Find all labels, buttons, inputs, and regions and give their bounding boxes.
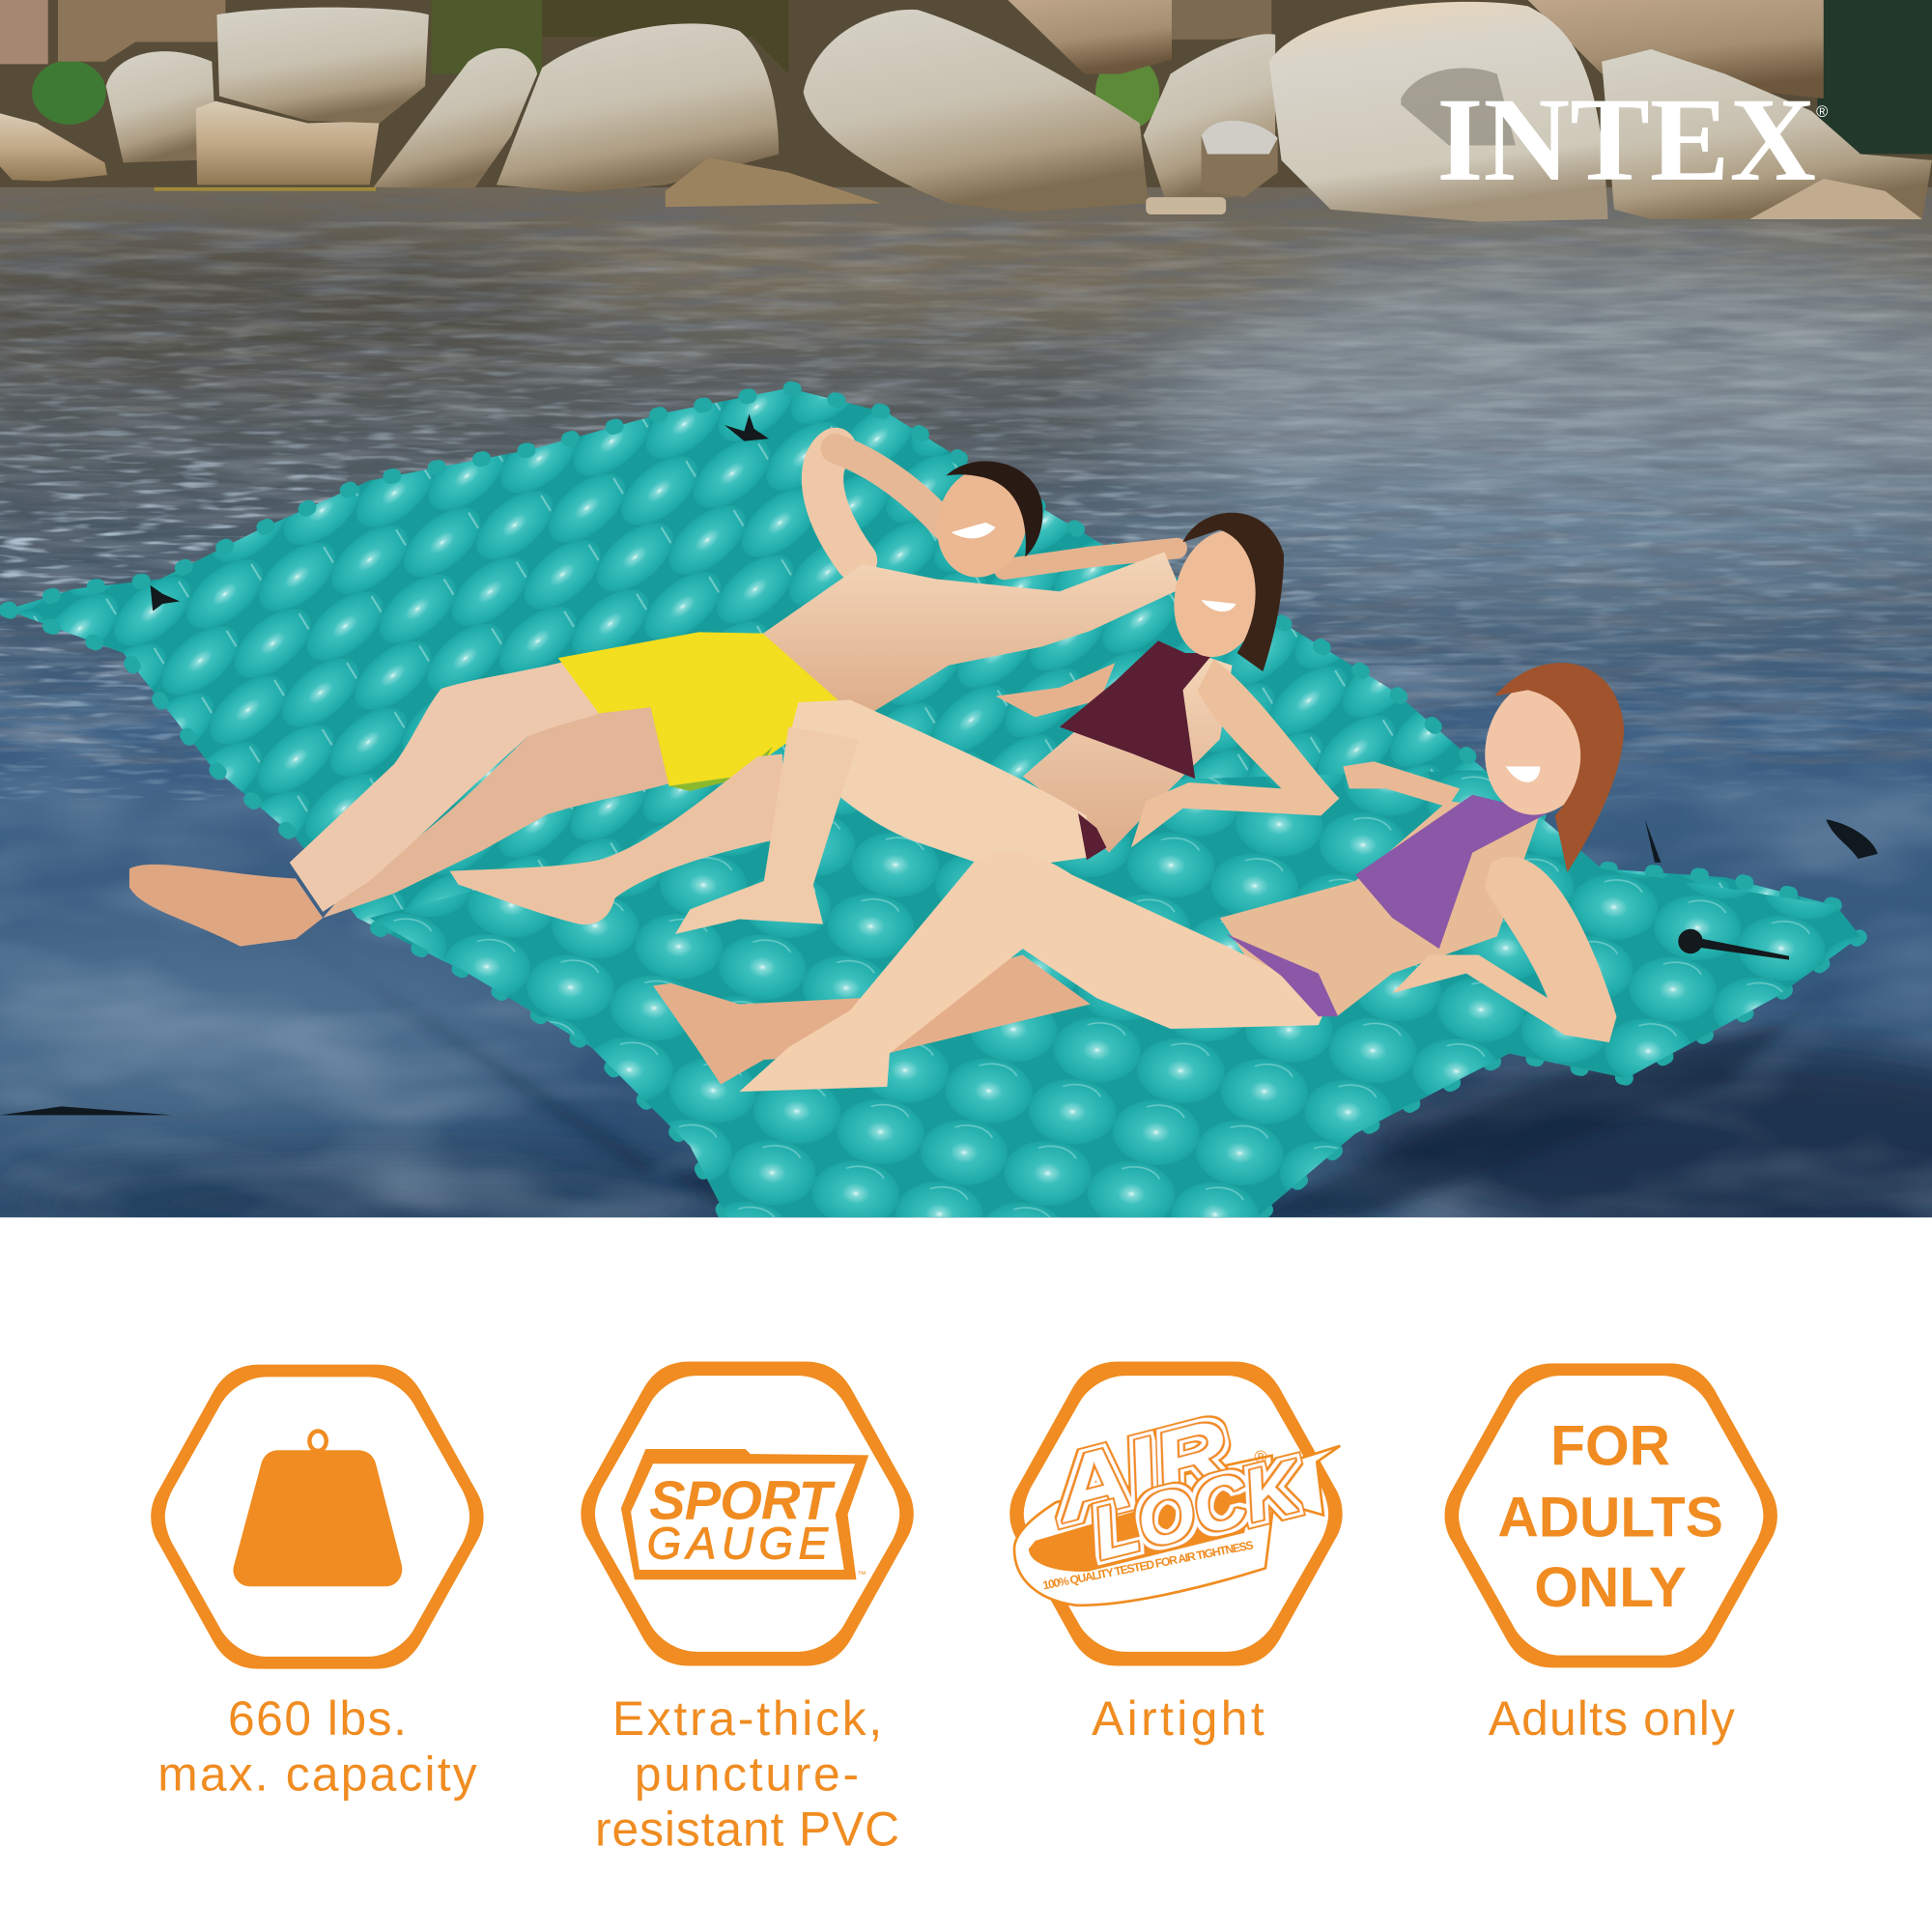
head	[1471, 667, 1609, 827]
caption: Adults only	[1489, 1691, 1735, 1746]
back leg	[653, 955, 1091, 1084]
caption: Extra-thick,	[612, 1691, 882, 1746]
upper leg	[290, 658, 599, 912]
INTEX logo: ®	[1816, 102, 1828, 121]
hexagon wording	[1497, 1415, 1723, 1619]
feature 2: sport gauge	[581, 1361, 914, 1857]
hexagon wording: FOR	[1550, 1415, 1670, 1478]
sport gauge logo	[621, 1449, 868, 1579]
feature 1: weight capacity	[151, 1365, 484, 1801]
banner and orange mass	[1014, 1446, 1340, 1605]
sport gauge logo: SPORT	[649, 1470, 837, 1531]
front leg	[739, 852, 1331, 1092]
maroon top	[1060, 640, 1213, 779]
mat shadow on water	[408, 1005, 1800, 1217]
icon: weight	[233, 1432, 402, 1586]
caption: max. capacity	[157, 1747, 477, 1801]
hexagon outline	[581, 1361, 914, 1665]
yellow shorts	[558, 632, 838, 786]
feature 3: airtight	[1009, 1361, 1343, 1746]
raised arm	[822, 448, 856, 560]
hexagon outline	[1009, 1361, 1343, 1665]
woman in purple bikini	[653, 663, 1624, 1092]
torso	[761, 552, 1180, 715]
hexagon wording: ADULTS	[1497, 1487, 1723, 1549]
caption: puncture-	[635, 1747, 859, 1801]
caption: resistant PVC	[595, 1803, 899, 1857]
arm	[1392, 857, 1616, 1042]
head	[925, 458, 1038, 587]
arm	[1131, 659, 1339, 848]
woman in maroon bikini	[450, 513, 1339, 934]
hair	[947, 461, 1042, 557]
thigh	[788, 699, 1087, 870]
air lock logo: ®	[1254, 1447, 1267, 1466]
torso	[1023, 653, 1233, 853]
head	[1161, 521, 1278, 667]
INTEX logo: INTEX	[1436, 73, 1816, 206]
lake photograph	[0, 0, 1932, 1244]
red hair	[1494, 663, 1624, 872]
back leg	[450, 754, 783, 924]
hexagon outline	[1445, 1363, 1777, 1667]
air lock logo	[1014, 1402, 1340, 1605]
hair	[1182, 513, 1284, 671]
purple top	[1355, 795, 1548, 949]
man in yellow shorts	[129, 448, 1180, 947]
arm behind	[1343, 761, 1460, 807]
feature 4: adults only	[1445, 1363, 1777, 1746]
caption	[595, 1691, 899, 1857]
torso	[1220, 801, 1540, 1016]
lower leg	[323, 707, 669, 918]
sport gauge logo: GAUGE	[647, 1519, 830, 1569]
shoreline rocks	[0, 0, 1932, 222]
caption: 660 lbs.	[228, 1691, 407, 1746]
foot	[129, 865, 323, 947]
sport gauge logo: ™	[858, 1570, 867, 1579]
shin and foot	[675, 727, 859, 934]
teal inflatable mat	[6, 388, 1861, 1217]
water	[0, 179, 1932, 1244]
hexagon wording: ONLY	[1534, 1556, 1687, 1619]
mat valves and ties	[151, 414, 1789, 960]
caption	[157, 1691, 477, 1801]
hexagon outline	[151, 1365, 484, 1669]
air lock logo: AIR	[1042, 1402, 1238, 1541]
caption: Airtight	[1092, 1691, 1264, 1746]
air lock logo: 100% QUALITY TESTED FOR AIR TIGHTNESS	[1041, 1538, 1255, 1592]
air lock logo: LOCK	[1085, 1444, 1312, 1576]
